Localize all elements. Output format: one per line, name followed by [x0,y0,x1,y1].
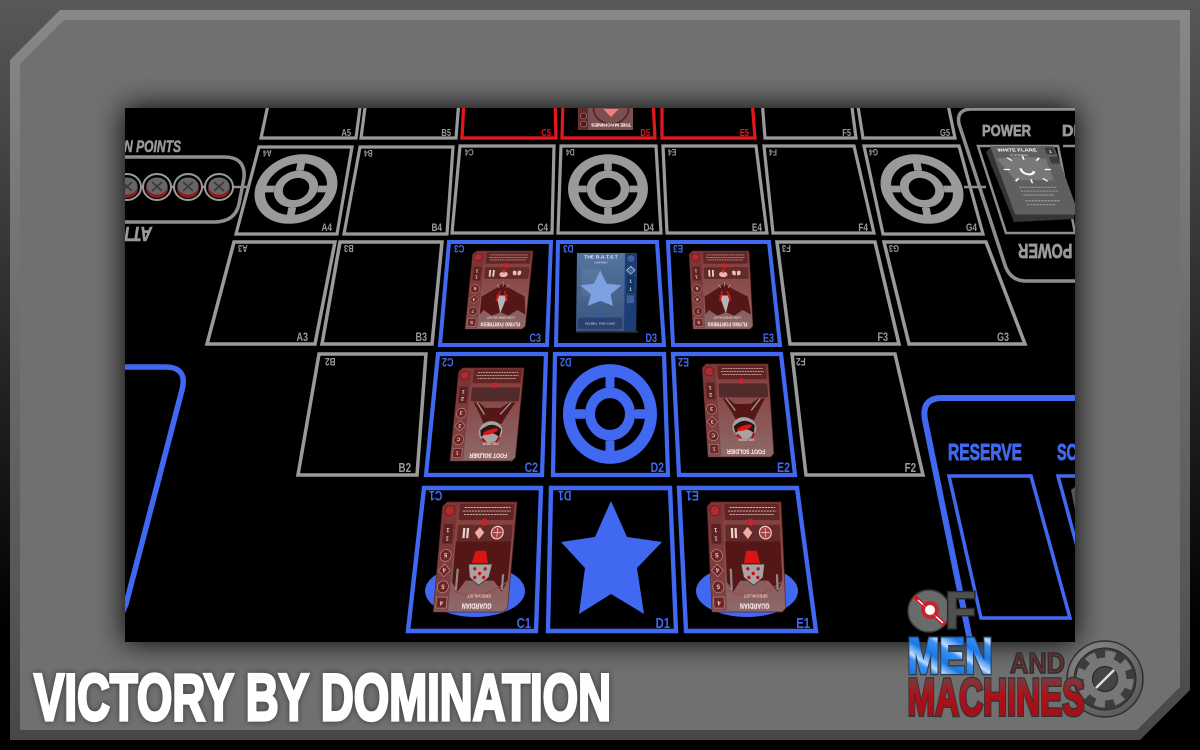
card: guardian C1: 5 [440,582,445,590]
row 3 squares [207,242,1025,344]
card: flying fortress C3: FLYING FORTRESS [480,320,521,326]
card: flying fortress E3: 1 [694,275,698,279]
card: foot soldier E2: SOLDIER [738,437,755,441]
card: captain D3: THE B.A.T.S.T [584,255,618,260]
card: guardian E1: 4 [717,599,721,606]
card: foot soldier E2: 1 [712,446,716,452]
track outline [120,157,244,222]
square labels: A3 [238,243,248,254]
icon: capture target G4 [880,159,964,219]
row 5 squares [259,108,957,140]
square labels: B3 [416,331,427,344]
square labels: E4 [752,222,763,234]
card: guardian C1: 4 [439,599,443,606]
square labels: B4 [364,148,373,158]
square labels: B4 [431,222,442,234]
logo word: machines: MACHINES [908,669,1084,727]
card: captain D3: NO WILL THE U HAS [585,321,615,325]
icon: capture target A4 [254,159,338,219]
heading: attack upside-down: ATTA [112,223,153,245]
logo word: machines [908,669,1084,727]
blue bases under guardians [425,573,798,617]
panel: destruction points track [125,140,249,242]
heading: reserve: RESERVE [948,439,1022,465]
square labels: A4 [263,148,272,158]
card: flying fortress E3: LOW SPECIALIST [713,316,741,320]
card: foot soldier C2: FOOT SOLDIER [469,452,507,459]
square labels: F3 [877,331,888,344]
square labels: A5 [341,127,351,138]
square labels: G5 [940,127,950,138]
heading: points: N POINTS [124,137,181,156]
square labels: A4 [321,222,332,234]
card: foot soldier C2: 1 [461,388,465,394]
card: captain D3: 1 [629,279,632,283]
card: guardian C1: 5 [443,551,448,558]
card: flying fortress E3: 1 [694,268,697,273]
card stub [1071,487,1075,510]
row 1 player squares [408,488,816,631]
card: guardian E1: 5 [714,551,719,558]
reserve slot [949,476,1070,618]
card: foot soldier E2: FOOT SOLDIER [726,448,765,455]
card: captain D3: 1 [629,286,632,291]
card: guardian C1: SPECIALIST [466,594,491,599]
square labels: E2 [678,355,689,368]
card: white flare: WHITE FLARE [997,148,1038,153]
row 4 squares [236,146,983,234]
card: flying fortress E3 [689,251,753,329]
square labels: B5 [441,127,451,138]
card: flying fortress C3: 5 [470,320,473,325]
square labels: E1 [686,488,699,503]
square labels: D2 [651,460,664,475]
card: guardian C1: GUARDIAN [461,601,492,611]
square labels: F2 [795,355,806,367]
card: flying fortress C3: 4 [472,297,476,302]
card: guardian C1: 1 [445,526,450,533]
card: white flare [986,146,1079,222]
square labels: D1 [656,614,670,631]
square labels: F4 [858,222,869,234]
square labels: E4 [668,147,676,157]
card: white flare: ⓞ STRIKER [1009,152,1029,157]
square labels: F4 [769,147,777,157]
card: foot soldier C2 [450,368,524,461]
square labels: C2 [442,355,453,368]
square labels: D1 [558,488,571,503]
heading: power upside-down: POWER [1018,239,1072,262]
card: guardian C1: 4 [442,566,446,573]
card: flying fortress C3: 1 [474,275,478,279]
square labels: G4 [869,147,878,157]
card: flying fortress E3: FLYING FORTRESS [707,320,748,326]
square labels: B2 [325,355,336,367]
logo word: machines: MACHINES [908,669,1084,727]
square labels: C1 [517,614,531,631]
card: guardian E1: 1 [713,526,717,533]
card: foot soldier C2: C [456,436,461,442]
square labels: E1 [796,614,810,631]
square labels: A3 [297,331,308,344]
card: guardian E1: SPECIALIST [743,594,768,599]
card: flying fortress C3: 7 [471,309,474,313]
card: foot soldier E2: 2 [709,391,712,397]
square labels: D2 [560,355,571,368]
row 2 squares [298,354,923,475]
square labels: F3 [782,243,791,254]
card: guardian E1: 5 [716,582,720,590]
square labels: E3 [763,332,774,345]
square labels: G3 [889,243,899,254]
card: flying fortress C3: LOW SPECIALIST [487,316,515,320]
square labels: C5 [541,127,551,138]
square labels: D5 [640,127,650,138]
square labels: C2 [525,460,538,475]
panel: game board [125,108,1075,642]
power slots [964,146,1080,233]
logo: of men and machines [908,582,1143,727]
icon: gear [1067,641,1143,717]
card: flying fortress C3: 6 [473,286,477,291]
square labels: C3 [454,242,465,254]
card: foot soldier C2: 2 [461,395,464,401]
panel: power area [959,109,1080,281]
card: white flare: 1 [1048,150,1053,154]
card: foot soldier E2: 3 [710,405,713,411]
logo word: of: O [908,588,950,637]
square labels: C4 [465,147,474,157]
card: foot soldier E2: 1 [708,384,712,390]
card: guardian C1: 1 [445,535,449,542]
square labels: E3 [672,242,683,254]
card: guardian E1: 1 [714,535,718,542]
card: foot soldier E2 [702,364,774,457]
title: VICTORY BY DOMINATION [34,660,611,734]
icon: capture target D2 [569,371,651,457]
square labels: B3 [344,243,354,254]
square labels: C3 [530,332,541,345]
card: the machines (D5) [578,108,633,130]
card: foot soldier C2: SOLDIER [482,441,499,445]
connector [125,186,249,188]
square labels: G4 [966,222,978,234]
square labels: D3 [646,332,657,345]
power outline [959,109,1080,281]
square labels: E2 [777,460,790,475]
row 2 player squares [426,354,795,475]
heading: second column: DI [1062,123,1078,140]
card: flying fortress C3: 1 [475,268,479,273]
title: VICTORY BY DOMINATION [34,660,611,734]
logo word: and: AND [1010,648,1065,680]
panel: left blue tray [118,367,183,618]
square labels: B2 [399,462,411,475]
second slot [1056,474,1075,546]
card: flying fortress E3: 5 [697,320,700,325]
card: guardian E1 [707,502,786,612]
square labels: E5 [740,127,749,138]
card: flying fortress E3: 7 [696,309,700,313]
tray outline [924,398,1082,650]
square labels: G3 [997,331,1009,344]
square labels: C1 [429,488,442,503]
card: captain D3 [576,253,639,333]
logo word: men: MEN [908,628,992,684]
card: guardian C1 [433,502,517,612]
square labels [238,127,1009,631]
panel: reserve tray [924,398,1082,650]
heading: second tray: SC [1057,439,1077,465]
card: foot soldier C2: 3 [459,409,463,415]
square labels: D4 [643,222,654,234]
row 3 player squares [440,242,780,345]
card: foot soldier C2: 1 [456,450,459,456]
icon: capture target D4 [573,159,643,219]
card: foot soldier E2: C [711,432,715,438]
square labels: D4 [566,147,575,157]
square labels: F2 [905,462,916,475]
square labels: C4 [537,222,548,234]
card: the machines (D5): THE MACHINES [590,122,631,127]
card: flying fortress E3: 4 [696,297,699,302]
card: flying fortress C3 [465,251,533,329]
icon: star D1 [561,501,662,614]
title [34,660,611,734]
card: foot soldier E2: 3 [711,418,714,424]
card: guardian E1: 4 [715,566,719,573]
logo word: of: F [945,582,976,640]
card: flying fortress E3: 6 [695,286,698,291]
logo word: of [908,582,976,640]
card: foot soldier C2: 3 [458,422,462,428]
heading: power: POWER [982,123,1031,140]
logo word: men: MEN [908,628,992,684]
square labels: D3 [563,242,574,254]
square labels: F5 [842,127,851,138]
tokens [113,174,233,200]
card: captain D3: CAPTAIN [594,261,607,265]
card: guardian E1: GUARDIAN [740,601,770,611]
